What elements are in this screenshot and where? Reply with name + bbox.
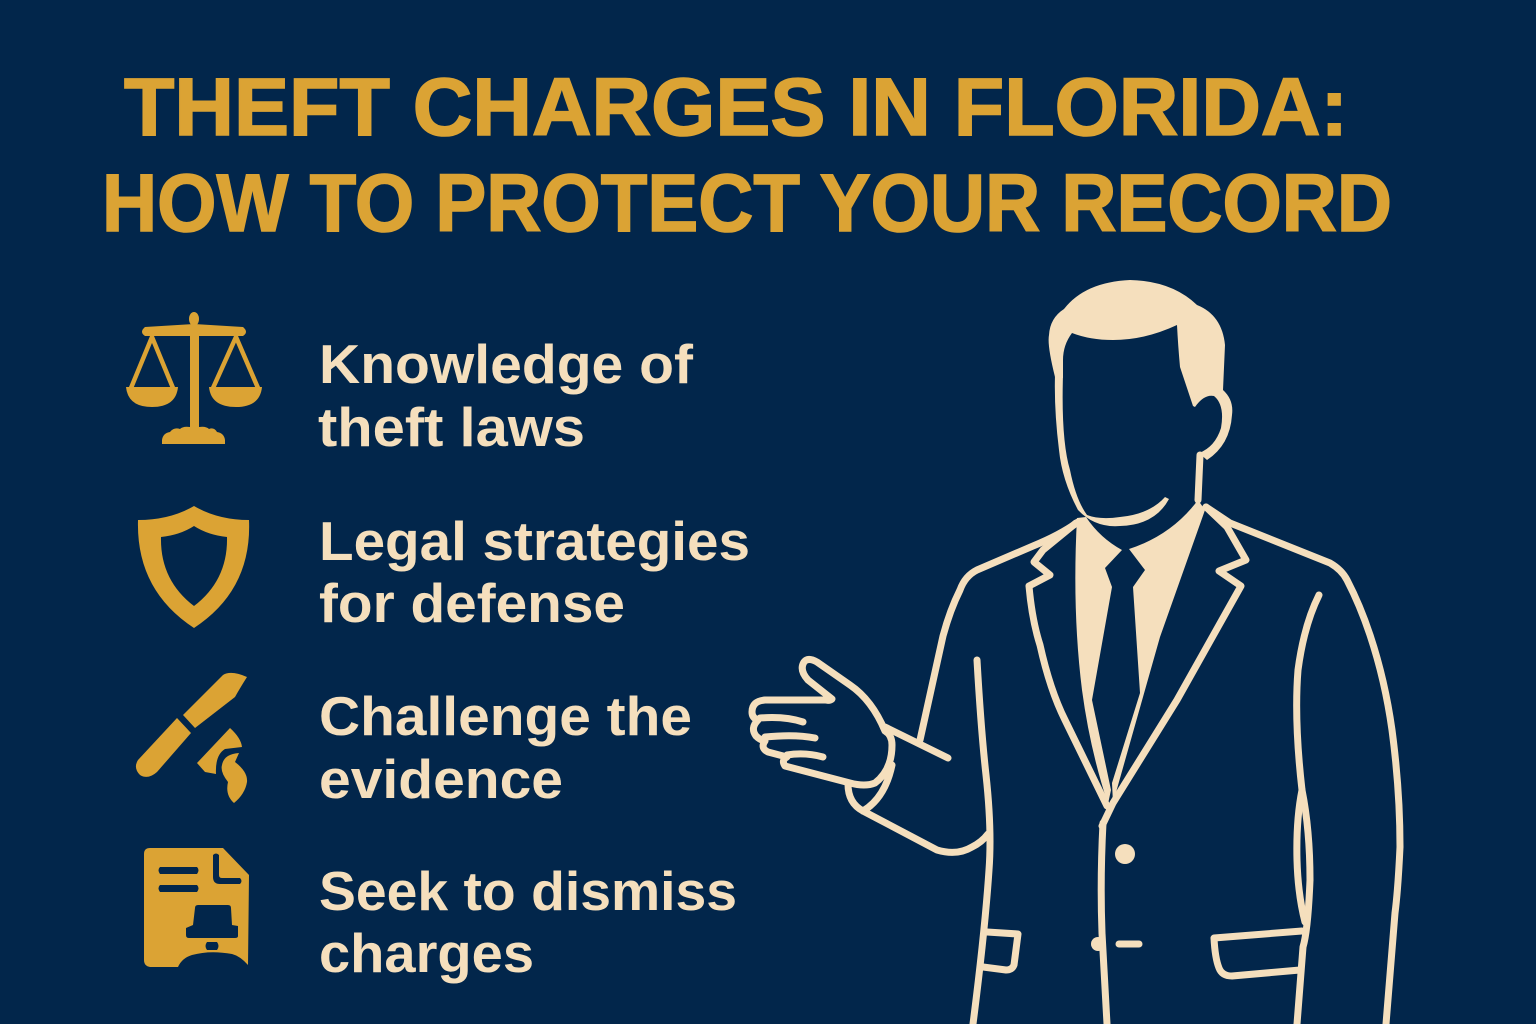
hand: [752, 660, 892, 785]
text: knowledge of theft laws: Knowledge of: [319, 333, 694, 395]
left shirt panel: [1075, 517, 1122, 804]
illustration: lawyer in suit: [752, 280, 1400, 1024]
hair and ear: [1049, 280, 1232, 460]
icon: broken blade: [136, 673, 247, 803]
neck line: [1198, 455, 1200, 500]
right shoulder and outer sleeve: [1206, 507, 1400, 1024]
lower button and buttonhole: [1091, 937, 1139, 951]
inner left arm line: [973, 660, 990, 1024]
cuff: [885, 727, 948, 758]
right shirt panel: [1112, 500, 1205, 803]
left pocket: [983, 932, 1018, 970]
text: challenge the evidence: evidence: [319, 748, 563, 810]
text: legal strategies for defense: [319, 510, 750, 634]
button: [1115, 844, 1135, 864]
icon: scales of justice: [126, 312, 262, 444]
shirt cuff: [848, 765, 892, 811]
text: challenge the evidence: Challenge the: [319, 685, 692, 747]
text: legal strategies for defense: for defense: [319, 572, 625, 634]
face outline and chin: [1055, 375, 1169, 526]
text: seek to dismiss charges: [319, 860, 737, 984]
text: seek to dismiss charges: charges: [319, 922, 534, 984]
icon: document with stamp: [144, 848, 249, 967]
text: legal strategies for defense: Legal strategies: [319, 510, 750, 572]
title: HOW TO PROTECT YOUR RECORD: [102, 158, 1392, 249]
text: knowledge of theft laws: [318, 333, 694, 458]
right pocket: [1214, 931, 1302, 976]
text: challenge the evidence: [319, 685, 692, 810]
right lapel: [1102, 507, 1246, 826]
front edge of jacket: [1101, 823, 1107, 1024]
title: [102, 62, 1392, 249]
text: knowledge of theft laws: theft laws: [318, 396, 585, 458]
title: THEFT CHARGES IN FLORIDA:: [124, 62, 1348, 153]
lower arm: [863, 811, 988, 852]
inner right sleeve: [1297, 595, 1319, 1024]
left lapel: [1029, 523, 1107, 806]
icon: shield: [138, 506, 249, 628]
text: seek to dismiss charges: Seek to dismiss: [319, 860, 737, 922]
fingers: [760, 718, 823, 757]
left shoulder and arm: [920, 522, 1078, 740]
